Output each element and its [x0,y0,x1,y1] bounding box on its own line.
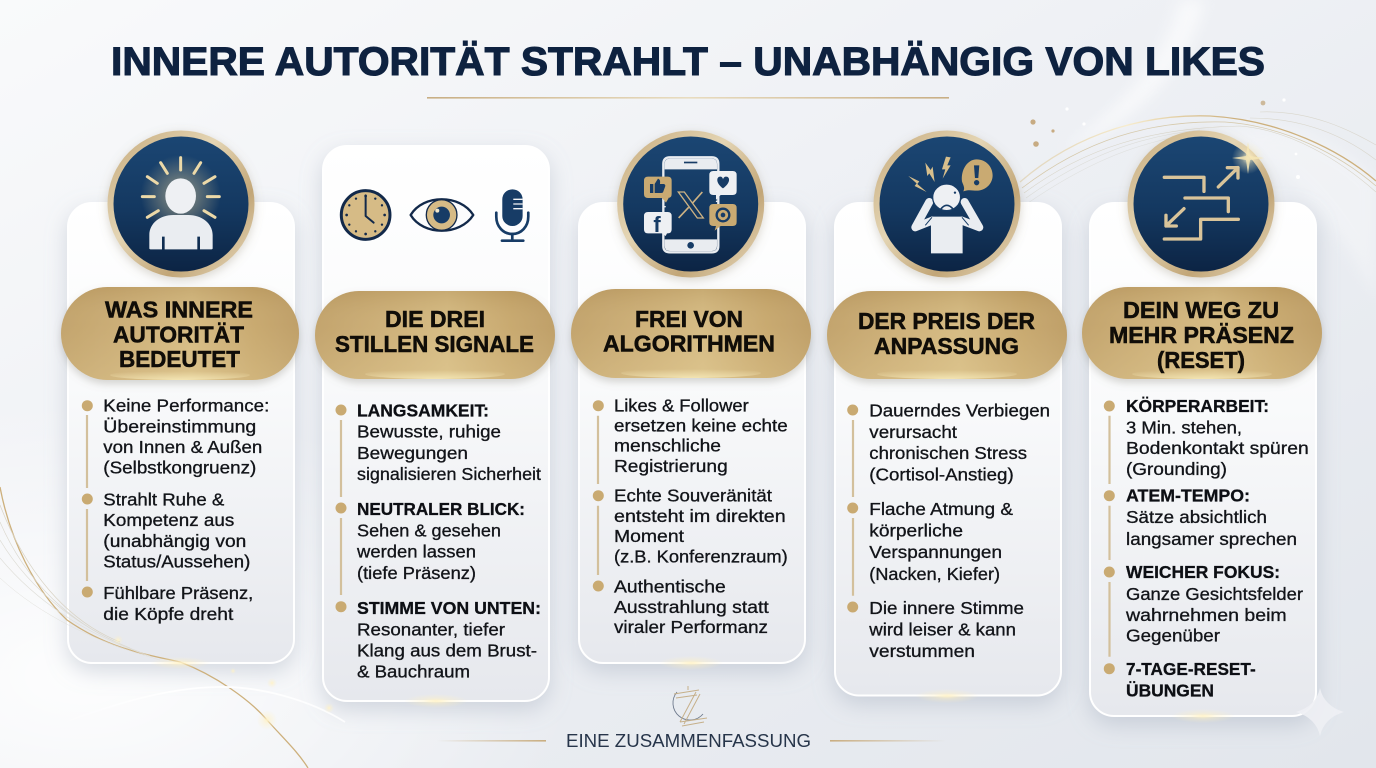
text block: Sätze absichtlich [1126,507,1267,527]
text block: von Innen & Außen [103,437,262,457]
text block: wahrnehmen beim [1125,605,1287,625]
text block: Klang aus dem Brust- [357,641,537,661]
text block [614,396,788,637]
pill heading: ALGORITHMEN [603,331,775,357]
text block: (Nacken, Kiefer) [869,564,1000,584]
icon: stressed person [874,130,1020,278]
pill heading: (RESET) [1157,347,1245,373]
timeline [593,400,604,592]
text block: Flache Atmung & [869,499,1013,519]
panel: frei von algorithmen [571,130,811,663]
text block: ersetzen keine echte [614,416,788,436]
text block: (unabhängig von [103,531,246,551]
decorative swoosh top right [1020,112,1376,203]
timeline [336,404,346,612]
text block: Dauerndes Verbiegen [869,401,1050,421]
text block: 3 Min. stehen, [1126,418,1242,438]
text block: viraler Performanz [614,617,768,637]
text block: Likes & Follower [614,396,749,416]
icon: phone with social media [617,130,764,278]
text block [103,396,269,624]
text block: Authentische [614,577,726,597]
pill heading: DEIN WEG ZU [1123,297,1279,323]
decorative swoosh bottom left [0,487,345,768]
text block: Bewusste, ruhige [357,422,501,442]
text block: Kompetenz aus [103,510,235,530]
text block: (tiefe Präsenz) [357,563,476,583]
text block: KÖRPERARBEIT: [1126,396,1269,416]
pill heading: DER PREIS DER [858,308,1035,334]
pill heading [827,291,1067,379]
text block: verursacht [869,422,957,442]
pill heading [61,287,299,380]
text block: ÜBUNGEN [1126,681,1214,701]
text block: Verspannungen [869,542,1002,562]
panel: der preis der anpassung [827,130,1067,696]
text block: ATEM-TEMPO: [1126,486,1250,506]
text block: verstummen [869,641,975,661]
icon: clock [341,191,390,239]
card [835,203,1061,696]
text block: WEICHER FOKUS: [1126,562,1280,582]
pill heading [315,291,555,379]
panel: die drei stillen signale [315,146,555,701]
pill heading [571,289,811,378]
timeline [847,404,858,612]
icon: steps with arrows [1128,130,1274,278]
pill heading: FREI VON [635,306,743,332]
text block: Die innere Stimme [869,598,1024,618]
text block: Fühlbare Präsenz, [103,583,253,603]
text block: Ausstrahlung statt [614,597,769,617]
pill heading: DIE DREI [385,306,485,332]
pill heading [1082,287,1322,379]
text block: (z.B. Konferenzraum) [614,547,788,567]
text block: Keine Performance: [103,396,269,416]
panel: was innere autorität bedeutet [61,130,299,663]
footer rule left [436,740,546,742]
card [1090,203,1316,716]
footer logo [673,686,707,726]
text block: langsamer sprechen [1126,529,1297,549]
text block [356,401,541,682]
icons: clock, eye, microphone [341,189,528,241]
pill heading: MEHR PRÄSENZ [1109,322,1294,348]
pill heading: ANPASSUNG [874,333,1019,359]
text block: Bodenkontakt spüren [1126,438,1309,458]
text block: (Cortisol-Anstieg) [869,465,1014,485]
pill heading: STILLEN SIGNALE [335,331,534,357]
text block: Resonanter, tiefer [357,620,505,640]
icon: phone with social media: f [653,212,661,237]
text block: Ganze Gesichtsfelder [1126,584,1303,604]
timeline [1104,400,1115,674]
text block: (Selbstkongruenz) [103,458,256,478]
pill heading: WAS INNERE [105,296,253,322]
text block: körperliche [869,521,963,541]
decorative star [1296,688,1344,736]
panel: dein weg zu mehr präsenz [1082,130,1322,716]
text block: die Köpfe dreht [103,604,233,624]
title rule [427,97,949,99]
text block: signalisieren Sicherheit [357,464,541,484]
card [68,203,294,663]
text block: & Bauchraum [357,662,470,682]
text block: menschliche [614,436,721,456]
footer text: EINE ZUSAMMENFASSUNG [566,731,811,751]
text block: Status/Aussehen) [103,552,250,572]
pill heading: BEDEUTET [119,346,241,372]
text block [1125,396,1309,701]
text block: Gegenüber [1126,626,1220,646]
text block: Echte Souveränität [614,486,772,506]
decorative glows [113,635,1235,730]
icon: eye [411,199,473,231]
text block: NEUTRALER BLICK: [357,499,525,519]
text block: entsteht im direkten [614,506,786,526]
text block: werden lassen [356,542,476,562]
text block: Sehen & gesehen [357,521,501,541]
card [323,146,549,701]
text block: chronischen Stress [869,443,1027,463]
text block [868,401,1050,661]
text block: Moment [614,526,684,546]
text block: 7-TAGE-RESET- [1126,659,1256,679]
card [579,203,805,663]
text block: Übereinstimmung [103,416,256,436]
icon: radiating person [108,130,254,278]
text block: (Grounding) [1126,459,1227,479]
text block: wird leiser & kann [868,620,1016,640]
text block: Bewegungen [357,443,468,463]
text block: LANGSAMKEIT: [357,401,489,421]
title: INNERE AUTORITÄT STRAHLT – UNABHÄNGIG VON LIKES [111,40,1265,84]
decorative dots top right [1030,98,1300,179]
text block: Registrierung [614,456,728,476]
text block: Strahlt Ruhe & [103,490,225,510]
icon: microphone [496,189,528,241]
text block: STIMME VON UNTEN: [357,598,541,618]
footer rule right [830,740,946,742]
timeline [82,400,93,598]
pill heading: AUTORITÄT [113,322,245,348]
